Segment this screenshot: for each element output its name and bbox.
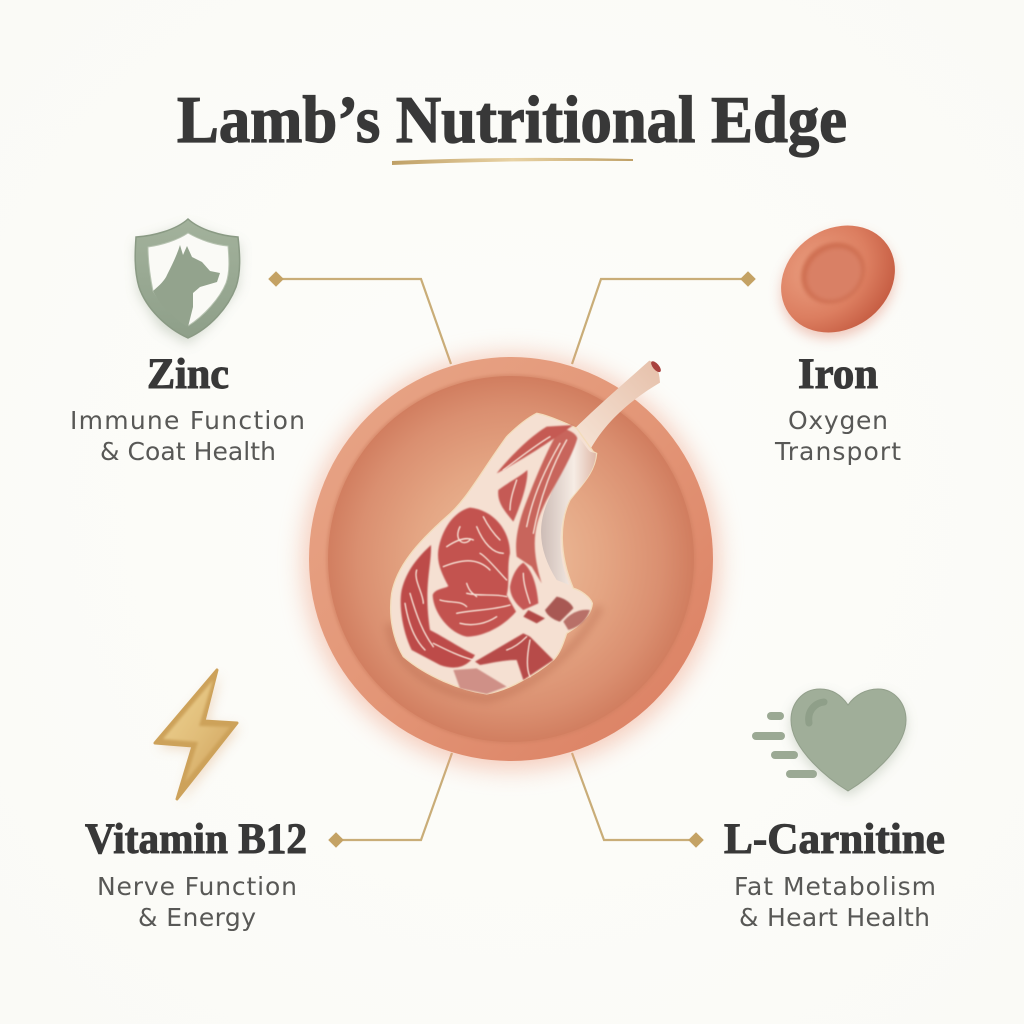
label: L-carnitine: & Heart Health (739, 903, 930, 932)
dog silhouette (153, 245, 220, 327)
label: L-carnitine: L-Carnitine (724, 816, 945, 863)
fat body (391, 413, 597, 694)
connector: vitamin B12 (328, 753, 452, 848)
title underline (392, 158, 633, 165)
label: L-carnitine (724, 816, 945, 932)
label: vitamin B12: Vitamin B12 (85, 816, 307, 863)
heart highlight (809, 702, 824, 723)
icon: iron red blood cell (760, 204, 916, 360)
label: zinc: Immune Function (70, 406, 305, 435)
label: zinc: & Coat Health (100, 437, 276, 466)
icon: zinc shield with dog (135, 219, 240, 344)
label: zinc (70, 351, 305, 466)
label: iron (774, 351, 901, 466)
central circle (303, 354, 719, 770)
label: iron: Iron (798, 351, 878, 398)
label: vitamin B12 (85, 816, 307, 932)
icon: L-carnitine heart (752, 689, 906, 796)
connector: iron (572, 271, 756, 364)
label: iron: Transport (774, 437, 901, 466)
label: vitamin B12: Nerve Function (97, 872, 297, 901)
label: iron: Oxygen (788, 406, 888, 435)
title: Lamb’s Nutritional Edge (177, 83, 847, 157)
connector: L-carnitine (572, 753, 704, 848)
marbling (405, 437, 567, 677)
label: L-carnitine: Fat Metabolism (734, 872, 936, 901)
lamb chop (390, 360, 663, 698)
rib strip (541, 435, 596, 585)
bone (573, 361, 660, 450)
icon: vitamin B12 lightning bolt (155, 670, 240, 803)
connector: zinc (268, 271, 451, 364)
label: vitamin B12: & Energy (138, 903, 256, 932)
speed lines (752, 712, 817, 778)
main eye muscle (433, 508, 516, 637)
label: zinc: Zinc (147, 351, 229, 398)
